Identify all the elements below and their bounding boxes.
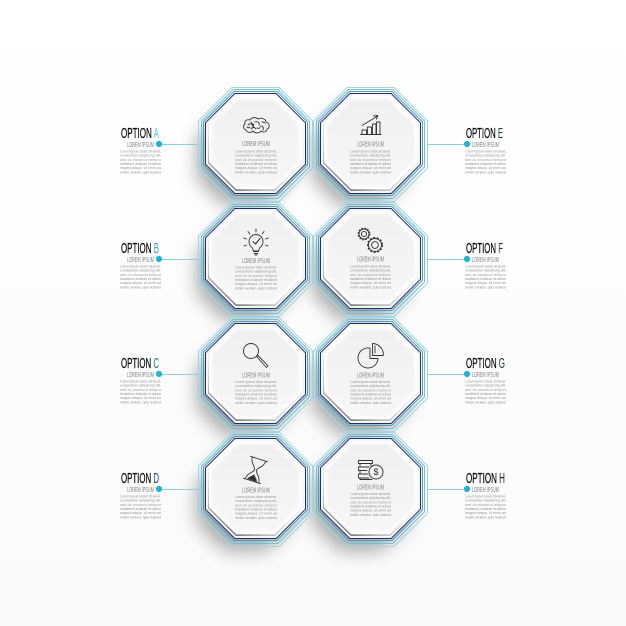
label: option C: incididunt ut labore et dolore bbox=[120, 392, 161, 396]
text: panel C body: magna aliqua. Ut enim ad bbox=[235, 397, 277, 401]
label: option B: magna aliqua. Ut enim ad bbox=[120, 281, 161, 285]
text: panel B body: incididunt ut labore et dolore bbox=[235, 278, 277, 282]
text: panel A body: Lorem ipsum dolor sit amet, bbox=[235, 150, 277, 154]
text: panel F body: sed do eiusmod tempor bbox=[350, 273, 392, 277]
text: panel B body: sed do eiusmod tempor bbox=[235, 274, 278, 278]
text: panel F body: magna aliqua. Ut enim ad bbox=[350, 281, 391, 285]
heading: panel C: LOREM IPSUM bbox=[242, 370, 270, 380]
label: option E: minim veniam, quis nostrud bbox=[465, 170, 506, 174]
panel: option F bbox=[314, 202, 428, 316]
text: panel E body: sed do eiusmod tempor bbox=[350, 158, 392, 162]
label: option H bbox=[428, 471, 507, 519]
text: panel G body bbox=[350, 380, 392, 405]
icon: light bulb with check bbox=[244, 229, 268, 255]
text: panel B body: minim veniam, quis nostrud bbox=[235, 286, 277, 290]
label: option E: Lorem ipsum dolor sit amet, bbox=[465, 150, 506, 154]
panel: option D bbox=[198, 432, 312, 546]
label: option G: sed do eiusmod tempor bbox=[465, 388, 507, 392]
text: panel G body: sed do eiusmod tempor bbox=[350, 388, 392, 392]
panel: option C bbox=[198, 318, 312, 432]
label: option C: LOREM IPSUM bbox=[127, 370, 154, 379]
panel: option G bbox=[314, 318, 428, 432]
label: option F: OPTION F bbox=[466, 241, 503, 257]
text: panel D body: Lorem ipsum dolor sit amet, bbox=[235, 495, 277, 499]
label: option A: OPTION A bbox=[121, 126, 159, 142]
text: panel G body: Lorem ipsum dolor sit amet, bbox=[350, 380, 391, 384]
text: panel A body bbox=[235, 150, 278, 174]
text: panel D body: consectetur adipiscing elit, bbox=[235, 499, 277, 503]
label: option H: minim veniam, quis nostrud bbox=[465, 515, 506, 519]
text: panel H body: minim veniam, quis nostrud bbox=[350, 513, 391, 517]
soft drop shadows bbox=[197, 110, 408, 551]
label: option A: minim veniam, quis nostrud bbox=[120, 170, 161, 174]
label: option C: sed do eiusmod tempor bbox=[120, 388, 162, 392]
label: option A: sed do eiusmod tempor bbox=[120, 158, 162, 162]
label: option F: magna aliqua. Ut enim ad bbox=[465, 281, 506, 285]
text: panel H body: incididunt ut labore et dolore bbox=[350, 504, 391, 508]
icon: growth chart bbox=[360, 116, 381, 134]
text: panel F body: incididunt ut labore et dolore bbox=[350, 277, 391, 281]
text: panel E body: consectetur adipiscing elit, bbox=[350, 154, 391, 158]
label: option G: magna aliqua. Ut enim ad bbox=[465, 396, 506, 400]
label: option E bbox=[428, 126, 507, 174]
label: option F bbox=[428, 241, 507, 289]
label: option A: consectetur adipiscing elit, bbox=[120, 154, 161, 158]
label: option F: Lorem ipsum dolor sit amet, bbox=[465, 264, 506, 268]
text: panel C body: consectetur adipiscing elit, bbox=[235, 384, 277, 388]
text: panel A body: magna aliqua. Ut enim ad bbox=[235, 166, 277, 170]
text: panel G body: incididunt ut labore et dolore bbox=[350, 392, 391, 396]
label: option C: magna aliqua. Ut enim ad bbox=[120, 396, 161, 400]
label: option C: minim veniam, quis nostrud bbox=[120, 400, 161, 404]
label: option E: magna aliqua. Ut enim ad bbox=[465, 166, 506, 170]
text: panel G body: consectetur adipiscing elit, bbox=[350, 384, 391, 388]
label: option H: OPTION H bbox=[466, 471, 505, 487]
text: panel F body: Lorem ipsum dolor sit amet, bbox=[350, 264, 391, 268]
text: panel H body: consectetur adipiscing elit, bbox=[350, 496, 391, 500]
label: option B: sed do eiusmod tempor bbox=[120, 273, 162, 277]
label: option F: sed do eiusmod tempor bbox=[465, 273, 507, 277]
label: option H: sed do eiusmod tempor bbox=[465, 503, 507, 507]
heading: panel D: LOREM IPSUM bbox=[242, 486, 270, 494]
label: option E: incididunt ut labore et dolore bbox=[465, 162, 506, 166]
label: option B: consectetur adipiscing elit, bbox=[120, 269, 161, 273]
label: option E: OPTION E bbox=[466, 126, 503, 142]
label: option D: Lorem ipsum dolor sit amet, bbox=[120, 494, 161, 498]
label: option D: LOREM IPSUM bbox=[127, 485, 154, 494]
heading: panel A: LOREM IPSUM bbox=[242, 139, 270, 148]
text: panel A body: consectetur adipiscing elit, bbox=[235, 154, 277, 158]
label: option D: minim veniam, quis nostrud bbox=[120, 515, 161, 519]
label: option H: consectetur adipiscing elit, bbox=[465, 499, 506, 503]
label: option D: sed do eiusmod tempor bbox=[120, 503, 162, 507]
icon: magnifying glass bbox=[244, 344, 268, 368]
text: panel F body: consectetur adipiscing elit, bbox=[350, 269, 391, 273]
label: option B: Lorem ipsum dolor sit amet, bbox=[120, 264, 161, 268]
label: option B: LOREM IPSUM bbox=[127, 255, 154, 264]
label: option F: consectetur adipiscing elit, bbox=[465, 269, 506, 273]
heading: panel H: LOREM IPSUM bbox=[357, 482, 384, 492]
text: panel B body: consectetur adipiscing elit, bbox=[235, 270, 277, 274]
text: panel E body: incididunt ut labore et dolore bbox=[350, 162, 391, 166]
heading: panel F: LOREM IPSUM bbox=[357, 254, 384, 264]
label: option H: incididunt ut labore et dolore bbox=[465, 507, 506, 511]
label: option G: minim veniam, quis nostrud bbox=[465, 400, 506, 404]
text: panel G body: magna aliqua. Ut enim ad bbox=[350, 397, 391, 401]
label: option C: Lorem ipsum dolor sit amet, bbox=[120, 380, 161, 384]
label: option C bbox=[120, 356, 198, 404]
text: panel B body: magna aliqua. Ut enim ad bbox=[235, 282, 277, 286]
heading: panel B: LOREM IPSUM bbox=[242, 256, 270, 265]
label: option G: LOREM IPSUM bbox=[472, 370, 499, 379]
label: option A: LOREM IPSUM bbox=[127, 140, 154, 149]
icon: hourglass bbox=[243, 456, 268, 484]
panel: option A bbox=[198, 88, 312, 202]
label: option B: incididunt ut labore et dolore bbox=[120, 277, 161, 281]
text: panel E body: minim veniam, quis nostrud bbox=[350, 170, 391, 174]
text: panel E body: magna aliqua. Ut enim ad bbox=[350, 166, 391, 170]
label: option F: incididunt ut labore et dolore bbox=[465, 277, 506, 281]
label: option D: OPTION D bbox=[121, 471, 159, 487]
label: option B: OPTION B bbox=[121, 241, 159, 257]
label: option D bbox=[120, 471, 198, 519]
text: panel D body: incididunt ut labore et dolore bbox=[235, 507, 277, 511]
label: option C: consectetur adipiscing elit, bbox=[120, 384, 161, 388]
label: option F: minim veniam, quis nostrud bbox=[465, 285, 506, 289]
label: option D: incididunt ut labore et dolore bbox=[120, 507, 161, 511]
text: panel F body: minim veniam, quis nostrud bbox=[350, 285, 391, 289]
label: option D: magna aliqua. Ut enim ad bbox=[120, 511, 161, 515]
panel: option E bbox=[314, 88, 428, 202]
heading: panel E: LOREM IPSUM bbox=[357, 140, 384, 148]
label: option D: consectetur adipiscing elit, bbox=[120, 499, 161, 503]
text: panel C body: Lorem ipsum dolor sit amet, bbox=[235, 380, 277, 384]
label: option G: Lorem ipsum dolor sit amet, bbox=[465, 380, 506, 384]
text: panel B body: Lorem ipsum dolor sit amet, bbox=[235, 266, 277, 270]
panel: option H bbox=[314, 432, 428, 546]
text: panel E body bbox=[350, 150, 392, 174]
text: panel H body: sed do eiusmod tempor bbox=[350, 500, 392, 504]
icon: brain bbox=[244, 118, 269, 133]
label: option H: Lorem ipsum dolor sit amet, bbox=[465, 494, 506, 498]
label: option A bbox=[120, 126, 198, 174]
label: option E: LOREM IPSUM bbox=[472, 140, 499, 149]
label: option H: magna aliqua. Ut enim ad bbox=[465, 511, 506, 515]
text: panel A body: incididunt ut labore et dolore bbox=[235, 162, 277, 166]
text: panel D body: magna aliqua. Ut enim ad bbox=[235, 512, 277, 516]
heading: panel G: LOREM IPSUM bbox=[357, 370, 384, 380]
label: option C: OPTION C bbox=[121, 356, 159, 372]
label: option B bbox=[120, 241, 198, 289]
label: option G: consectetur adipiscing elit, bbox=[465, 384, 506, 388]
text: panel C body: sed do eiusmod tempor bbox=[235, 388, 278, 392]
icon: pie chart bbox=[358, 344, 383, 368]
text: panel D body bbox=[235, 495, 278, 520]
text: panel F body bbox=[350, 264, 392, 289]
label: option E: consectetur adipiscing elit, bbox=[465, 154, 506, 158]
label: option E: sed do eiusmod tempor bbox=[465, 158, 507, 162]
label: option G: incididunt ut labore et dolore bbox=[465, 392, 506, 396]
text: panel E body: Lorem ipsum dolor sit amet, bbox=[350, 150, 391, 154]
text: panel C body bbox=[235, 380, 278, 405]
label: option F: LOREM IPSUM bbox=[472, 255, 499, 264]
label: option A: Lorem ipsum dolor sit amet, bbox=[120, 150, 161, 154]
label: option A: magna aliqua. Ut enim ad bbox=[120, 166, 161, 170]
text: panel H body: Lorem ipsum dolor sit amet, bbox=[350, 492, 391, 496]
text: panel G body: minim veniam, quis nostrud bbox=[350, 401, 391, 405]
text: panel H body: magna aliqua. Ut enim ad bbox=[350, 509, 391, 513]
text: panel D body: minim veniam, quis nostrud bbox=[235, 516, 277, 520]
label: option G: OPTION G bbox=[466, 356, 505, 372]
text: panel D body: sed do eiusmod tempor bbox=[235, 503, 278, 507]
label: option A: incididunt ut labore et dolore bbox=[120, 162, 161, 166]
label: option G bbox=[428, 356, 507, 404]
label: option B: minim veniam, quis nostrud bbox=[120, 285, 161, 289]
panel: option B bbox=[198, 202, 312, 316]
text: panel B body bbox=[235, 266, 278, 290]
text: panel H body bbox=[350, 492, 392, 517]
text: panel A body: sed do eiusmod tempor bbox=[235, 158, 278, 162]
text: panel A body: minim veniam, quis nostrud bbox=[235, 170, 277, 174]
text: panel C body: minim veniam, quis nostrud bbox=[235, 401, 277, 405]
icon: coins: $ bbox=[373, 467, 379, 477]
text: panel C body: incididunt ut labore et dolore bbox=[235, 392, 277, 396]
icon: gears bbox=[358, 228, 382, 252]
label: option H: LOREM IPSUM bbox=[472, 485, 499, 494]
